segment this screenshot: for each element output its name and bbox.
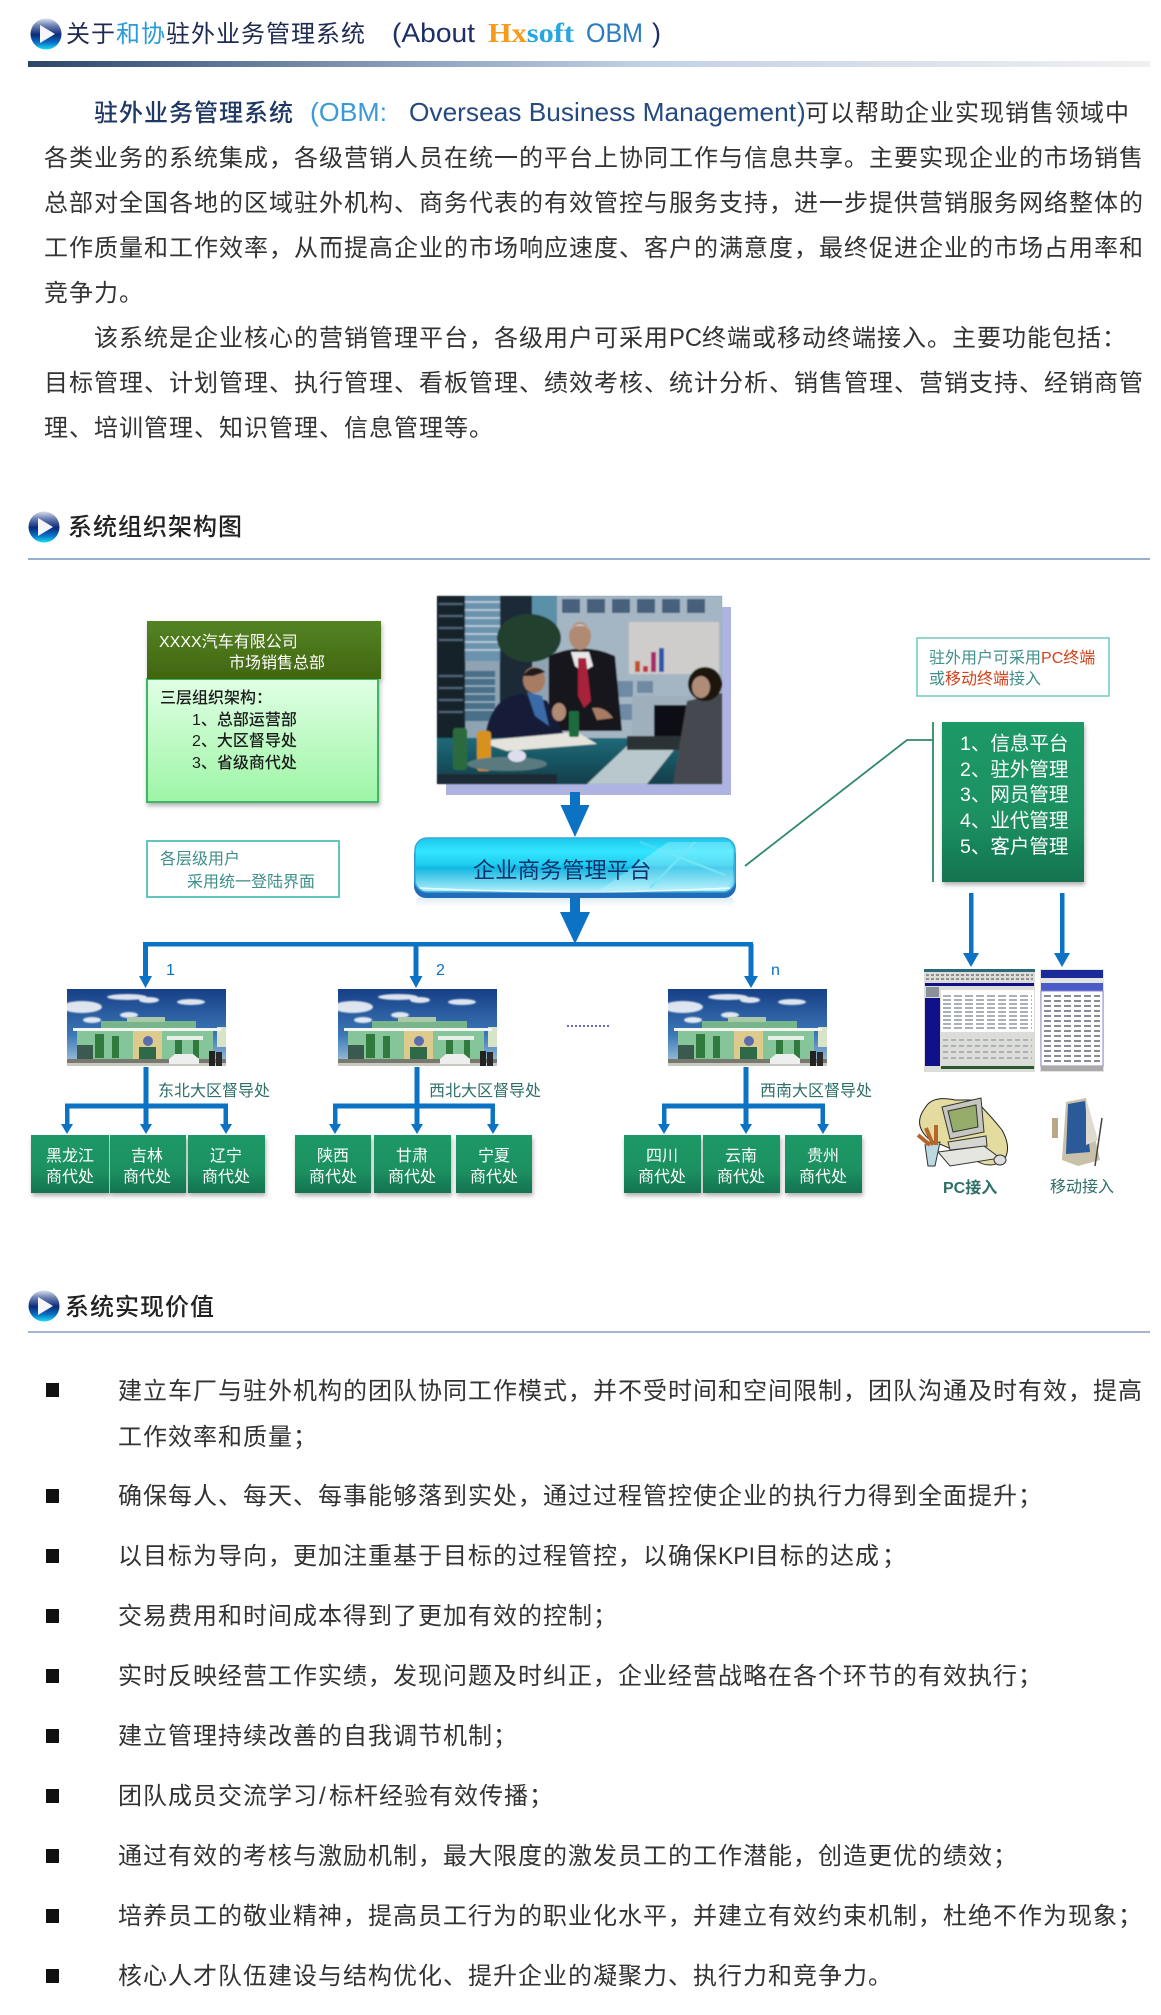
- label: mobile access: 移动接入: [1050, 1178, 1114, 1196]
- branch: northwest: [329, 1067, 499, 1134]
- intro paragraphs: 目标管理、计划管理、执行管理、看板管理、绩效考核、统计分析、销售管理、营销支持、经销商管: [44, 370, 1144, 397]
- section header: about OBM: [28, 18, 1150, 67]
- item 7: [46, 1783, 554, 1810]
- panel: headquarters org structure: 3、省级商代处: [192, 754, 297, 772]
- callout: unified login: 各层级用户: [160, 850, 240, 868]
- panel: function menu: 3、网员管理: [960, 784, 1068, 806]
- province boxes: southwest: 四川: [646, 1148, 678, 1165]
- panel: headquarters org structure: 市场销售总部: [229, 654, 325, 672]
- intro paragraphs: 驻外业务管理系统: [94, 100, 294, 127]
- province boxes: southwest: 云南: [725, 1147, 757, 1165]
- intro paragraphs: PC: [669, 324, 702, 352]
- intro paragraphs: ): [797, 97, 806, 127]
- callout: terminal access: [917, 638, 1109, 696]
- tree branch labels: 1: [166, 962, 175, 979]
- callout: terminal access: 驻外用户可采用PC终端: [929, 649, 1095, 667]
- branch: northeast: [61, 1067, 232, 1134]
- province boxes: southwest: 商代处: [717, 1168, 765, 1186]
- section header: about OBM: ): [652, 18, 661, 48]
- intro paragraphs: 各类业务的系统集成，各级营销人员在统一的平台上协同工作与信息共享。主要实现企业的市场销售: [44, 145, 1144, 172]
- connector: platform to menu: [745, 722, 933, 882]
- province boxes: southwest: 商代处: [638, 1168, 686, 1186]
- section header: organisation chart: 系统组织架构图: [68, 514, 243, 541]
- province boxes: northeast: 辽宁: [210, 1147, 242, 1165]
- label: PC access: PC接入: [943, 1179, 997, 1197]
- item 2: 确保每人、每天、每事能够落到实处，通过过程管控使企业的执行力得到全面提升；: [118, 1483, 1043, 1510]
- section header: about OBM: (About: [392, 18, 476, 48]
- province boxes: northwest: 甘肃: [396, 1147, 428, 1165]
- province boxes: northwest: 陕西: [317, 1147, 349, 1165]
- province boxes: northeast: 商代处: [46, 1168, 94, 1186]
- section header: about OBM: Hxsoft: [488, 18, 574, 48]
- platform button: enterprise business management: 企业商务管理平台: [473, 858, 651, 883]
- region labels: [158, 1082, 872, 1100]
- intro paragraphs: Overseas Business Management: [409, 97, 797, 127]
- panel: headquarters org structure: [147, 621, 381, 802]
- panel: function menu: 5、客户管理: [960, 836, 1068, 858]
- platform button: enterprise business management: [414, 838, 736, 907]
- item 3: ；: [882, 1543, 907, 1570]
- intro paragraphs: 终端或移动终端接入。主要功能包括：: [702, 325, 1127, 352]
- section header: system value: [28, 1290, 1150, 1333]
- province boxes: northeast: [31, 1135, 265, 1193]
- tree branch labels: [166, 962, 780, 979]
- building: southwest: [663, 989, 827, 1066]
- item 3: [46, 1543, 907, 1570]
- item 7: /: [319, 1783, 326, 1810]
- intro paragraphs: 工作质量和工作效率，从而提高企业的市场响应速度、客户的满意度，最终促进企业的市场占用率和: [44, 235, 1144, 262]
- arrow: photo to platform: [560, 792, 590, 837]
- item 1: [46, 1378, 1143, 1451]
- item 7: 标杆经验有效传播；: [329, 1783, 554, 1810]
- intro paragraphs: 理、培训管理、知识管理、信息管理等。: [44, 415, 494, 442]
- item 10: 核心人才队伍建设与结构优化、提升企业的凝聚力、执行力和竞争力。: [118, 1963, 893, 1990]
- section header: system value: 系统实现价值: [65, 1294, 215, 1321]
- province boxes: northwest: 商代处: [309, 1168, 357, 1186]
- panel: function menu: 1、信息平台: [960, 733, 1068, 755]
- panel: headquarters org structure: 三层组织架构：: [160, 689, 272, 707]
- intro paragraphs: 该系统是企业核心的营销管理平台，各级用户可采用: [94, 325, 669, 352]
- panel: function menu: 2、驻外管理: [960, 759, 1068, 781]
- panel: headquarters org structure: 2、大区督导处: [192, 732, 297, 750]
- dotted ellipsis between regions: [567, 1025, 611, 1027]
- item 4: 交易费用和时间成本得到了更加有效的控制；: [118, 1603, 618, 1630]
- province boxes: northeast: 商代处: [123, 1168, 171, 1186]
- item 9: 培养员工的敬业精神，提高员工行为的职业化水平，并建立有效约束机制，杜绝不作为现象；: [118, 1903, 1143, 1930]
- tree connector with arrows: [139, 942, 758, 988]
- region labels: 西北大区督导处: [429, 1082, 541, 1100]
- screenshot: mobile interface: [1040, 969, 1104, 1072]
- province boxes: northwest: 宁夏: [478, 1147, 510, 1165]
- intro paragraphs: (OBM:: [310, 97, 387, 127]
- tree branch labels: 2: [436, 962, 445, 979]
- province boxes: northeast: 吉林: [131, 1147, 163, 1165]
- province boxes: southwest: [624, 1135, 862, 1193]
- region labels: 西南大区督导处: [760, 1082, 872, 1100]
- item 7: 团队成员交流学习: [118, 1783, 318, 1810]
- item 6: 建立管理持续改善的自我调节机制；: [118, 1723, 518, 1750]
- region labels: 东北大区督导处: [158, 1082, 270, 1100]
- intro paragraphs: 竞争力。: [44, 280, 144, 307]
- building: northeast: [62, 989, 226, 1066]
- callout: unified login: 采用统一登陆界面: [187, 873, 315, 891]
- item 3: 目标的达成: [755, 1543, 880, 1570]
- intro paragraphs: 可以帮助企业实现销售领域中: [805, 100, 1130, 127]
- item 1: 工作效率和质量；: [118, 1424, 318, 1451]
- arrow: platform to tree: [560, 898, 590, 944]
- intro paragraphs: [44, 97, 1144, 442]
- photo: business meeting: [437, 596, 731, 795]
- panel: headquarters org structure: 1、总部运营部: [192, 711, 297, 729]
- arrows: menu to terminals: [963, 893, 1070, 967]
- section header: about OBM: OBM: [586, 18, 643, 48]
- province boxes: southwest: 商代处: [799, 1168, 847, 1186]
- province boxes: northwest: [295, 1135, 532, 1193]
- item 3: 以目标为导向，更加注重基于目标的过程管控，以确保: [118, 1543, 718, 1570]
- province boxes: northwest: 商代处: [470, 1168, 518, 1186]
- section header: organisation chart: [28, 512, 1150, 560]
- panel: headquarters org structure: XXXX汽车有限公司: [159, 633, 298, 651]
- callout: unified login: [147, 841, 339, 897]
- intro paragraphs: 总部对全国各地的区域驻外机构、商务代表的有效管控与服务支持，进一步提供营销服务网络整体的: [44, 190, 1144, 217]
- value list: [46, 1378, 1143, 1990]
- province boxes: northeast: 黑龙江: [46, 1147, 94, 1165]
- panel: function menu: [942, 722, 1084, 882]
- section header: about OBM: 关于和协驻外业务管理系统: [66, 21, 366, 48]
- callout: terminal access: 或移动终端接入: [929, 670, 1041, 688]
- icon: mobile phone: [1052, 1098, 1102, 1166]
- province boxes: northwest: 商代处: [388, 1168, 436, 1186]
- screenshot: PC interface: [924, 969, 1035, 1072]
- item 1: 建立车厂与驻外机构的团队协同工作模式，并不受时间和空间限制，团队沟通及时有效，提高: [118, 1378, 1143, 1405]
- icon: PC computer: [918, 1098, 1008, 1166]
- tree branch labels: n: [771, 962, 780, 979]
- panel: function menu: 4、业代管理: [960, 810, 1068, 832]
- item 8: 通过有效的考核与激励机制，最大限度的激发员工的工作潜能，创造更优的绩效；: [118, 1843, 1018, 1870]
- branch: southwest: [658, 1067, 829, 1134]
- item 5: 实时反映经营工作实绩，发现问题及时纠正，企业经营战略在各个环节的有效执行；: [118, 1663, 1043, 1690]
- item 3: KPI: [718, 1543, 755, 1570]
- province boxes: northeast: 商代处: [202, 1168, 250, 1186]
- building: northwest: [333, 989, 497, 1066]
- province boxes: southwest: 贵州: [807, 1147, 839, 1165]
